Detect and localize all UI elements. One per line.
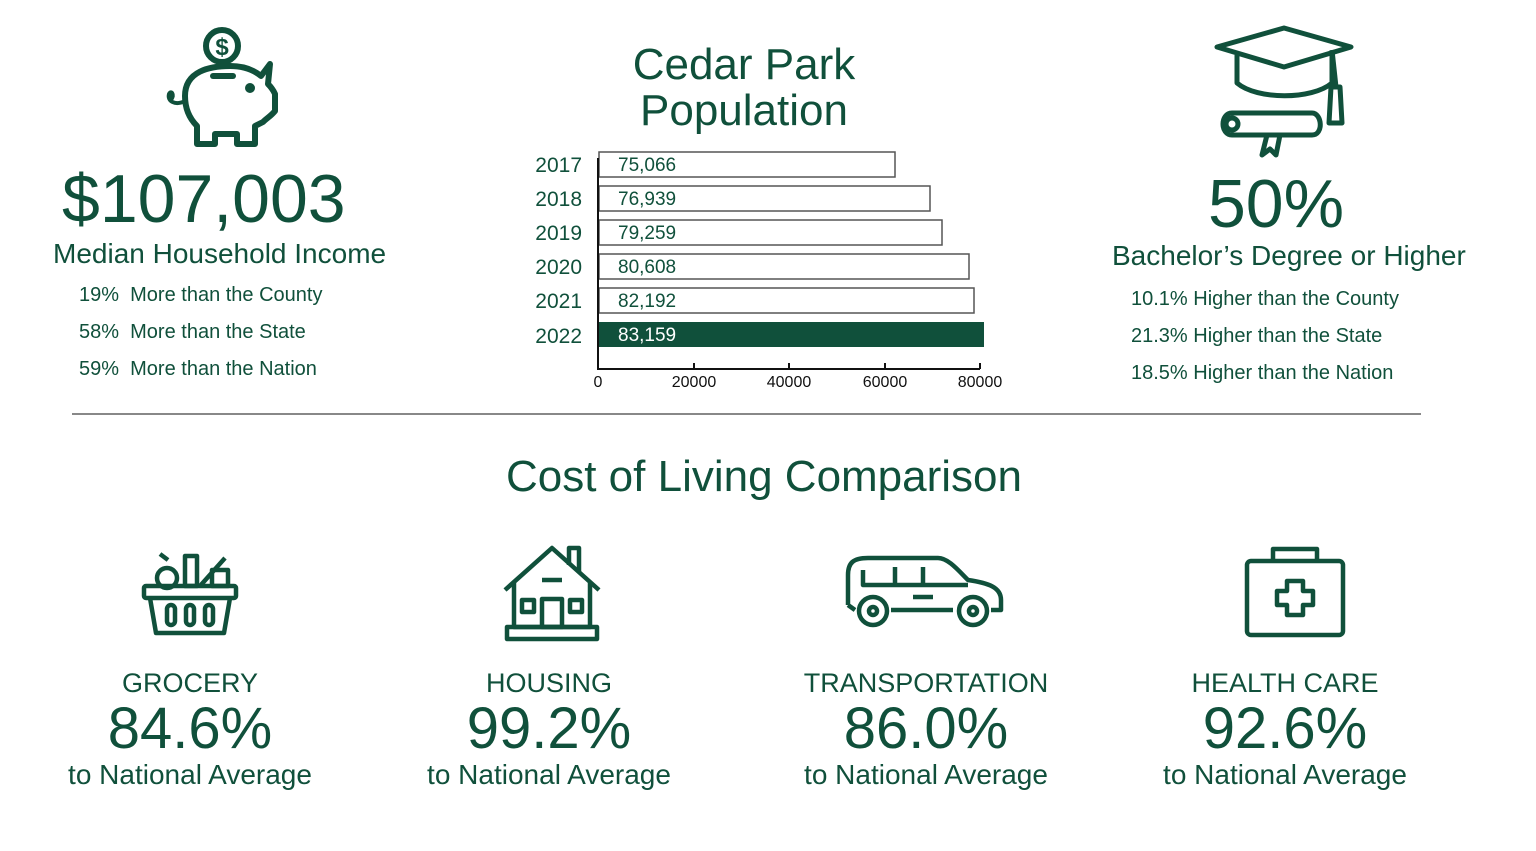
education value: 50% xyxy=(1208,166,1344,242)
housing stat: 99.2% xyxy=(467,696,631,761)
chart title: Cedar Park xyxy=(633,40,855,89)
education label: Bachelor’s Degree or Higher xyxy=(1112,240,1466,271)
bar chart: 80000 xyxy=(958,374,1002,391)
bar chart: 2020 xyxy=(535,256,582,279)
bar chart: 82,192 xyxy=(618,291,676,312)
education comparisons xyxy=(1131,288,1399,384)
bar chart: 0 xyxy=(594,374,603,391)
icon: first aid kit xyxy=(1244,546,1346,638)
income comparisons xyxy=(79,284,322,380)
income comparisons: 59% More than the Nation xyxy=(79,358,317,380)
grocery stat: to National Average xyxy=(68,759,312,790)
icon: piggy bank: $ xyxy=(215,34,229,61)
bar chart: 2022 xyxy=(535,325,582,348)
health care stat: 92.6% xyxy=(1203,696,1367,761)
transportation stat: to National Average xyxy=(804,759,1048,790)
icon: house xyxy=(504,546,600,642)
bar chart: 2018 xyxy=(535,188,582,211)
bar chart: 40000 xyxy=(767,374,811,391)
bar chart: 2017 xyxy=(535,154,582,177)
bar chart: 2019 xyxy=(535,222,582,245)
chart title: Population xyxy=(640,86,848,135)
bar chart: 60000 xyxy=(863,374,907,391)
transportation stat: 86.0% xyxy=(844,696,1008,761)
education comparisons: 10.1% Higher than the County xyxy=(1131,288,1399,310)
housing stat: to National Average xyxy=(427,759,671,790)
bar chart: 76,939 xyxy=(618,189,676,210)
housing stat xyxy=(427,668,671,790)
education comparisons: 21.3% Higher than the State xyxy=(1131,325,1382,347)
bar chart: 75,066 xyxy=(618,155,676,176)
bar chart: 2021 xyxy=(535,290,582,313)
section heading: Cost of Living Comparison xyxy=(506,452,1022,501)
income comparisons: 58% More than the State xyxy=(79,321,306,343)
income label: Median Household Income xyxy=(53,238,386,269)
icon: grocery basket xyxy=(142,552,238,636)
grocery stat: GROCERY xyxy=(122,668,258,698)
transportation stat: TRANSPORTATION xyxy=(804,668,1048,698)
icon: piggy bank xyxy=(166,27,278,147)
health care stat xyxy=(1163,668,1407,790)
icon: car xyxy=(846,556,1004,628)
health care stat: HEALTH CARE xyxy=(1191,668,1379,698)
education comparisons: 18.5% Higher than the Nation xyxy=(1131,362,1393,384)
transportation stat xyxy=(804,668,1048,790)
icon: graduation cap xyxy=(1214,26,1354,158)
income value: $107,003 xyxy=(62,161,346,237)
housing stat: HOUSING xyxy=(486,668,612,698)
grocery stat: 84.6% xyxy=(108,696,272,761)
bar chart: 79,259 xyxy=(618,223,676,244)
bar chart: 20000 xyxy=(672,374,716,391)
chart title xyxy=(633,40,856,135)
income comparisons: 19% More than the County xyxy=(79,284,322,306)
health care stat: to National Average xyxy=(1163,759,1407,790)
bar chart: 80,608 xyxy=(618,257,676,278)
bar chart xyxy=(535,151,1002,391)
divider xyxy=(72,413,1421,415)
bar chart: 83,159 xyxy=(618,325,676,346)
grocery stat xyxy=(68,668,312,790)
